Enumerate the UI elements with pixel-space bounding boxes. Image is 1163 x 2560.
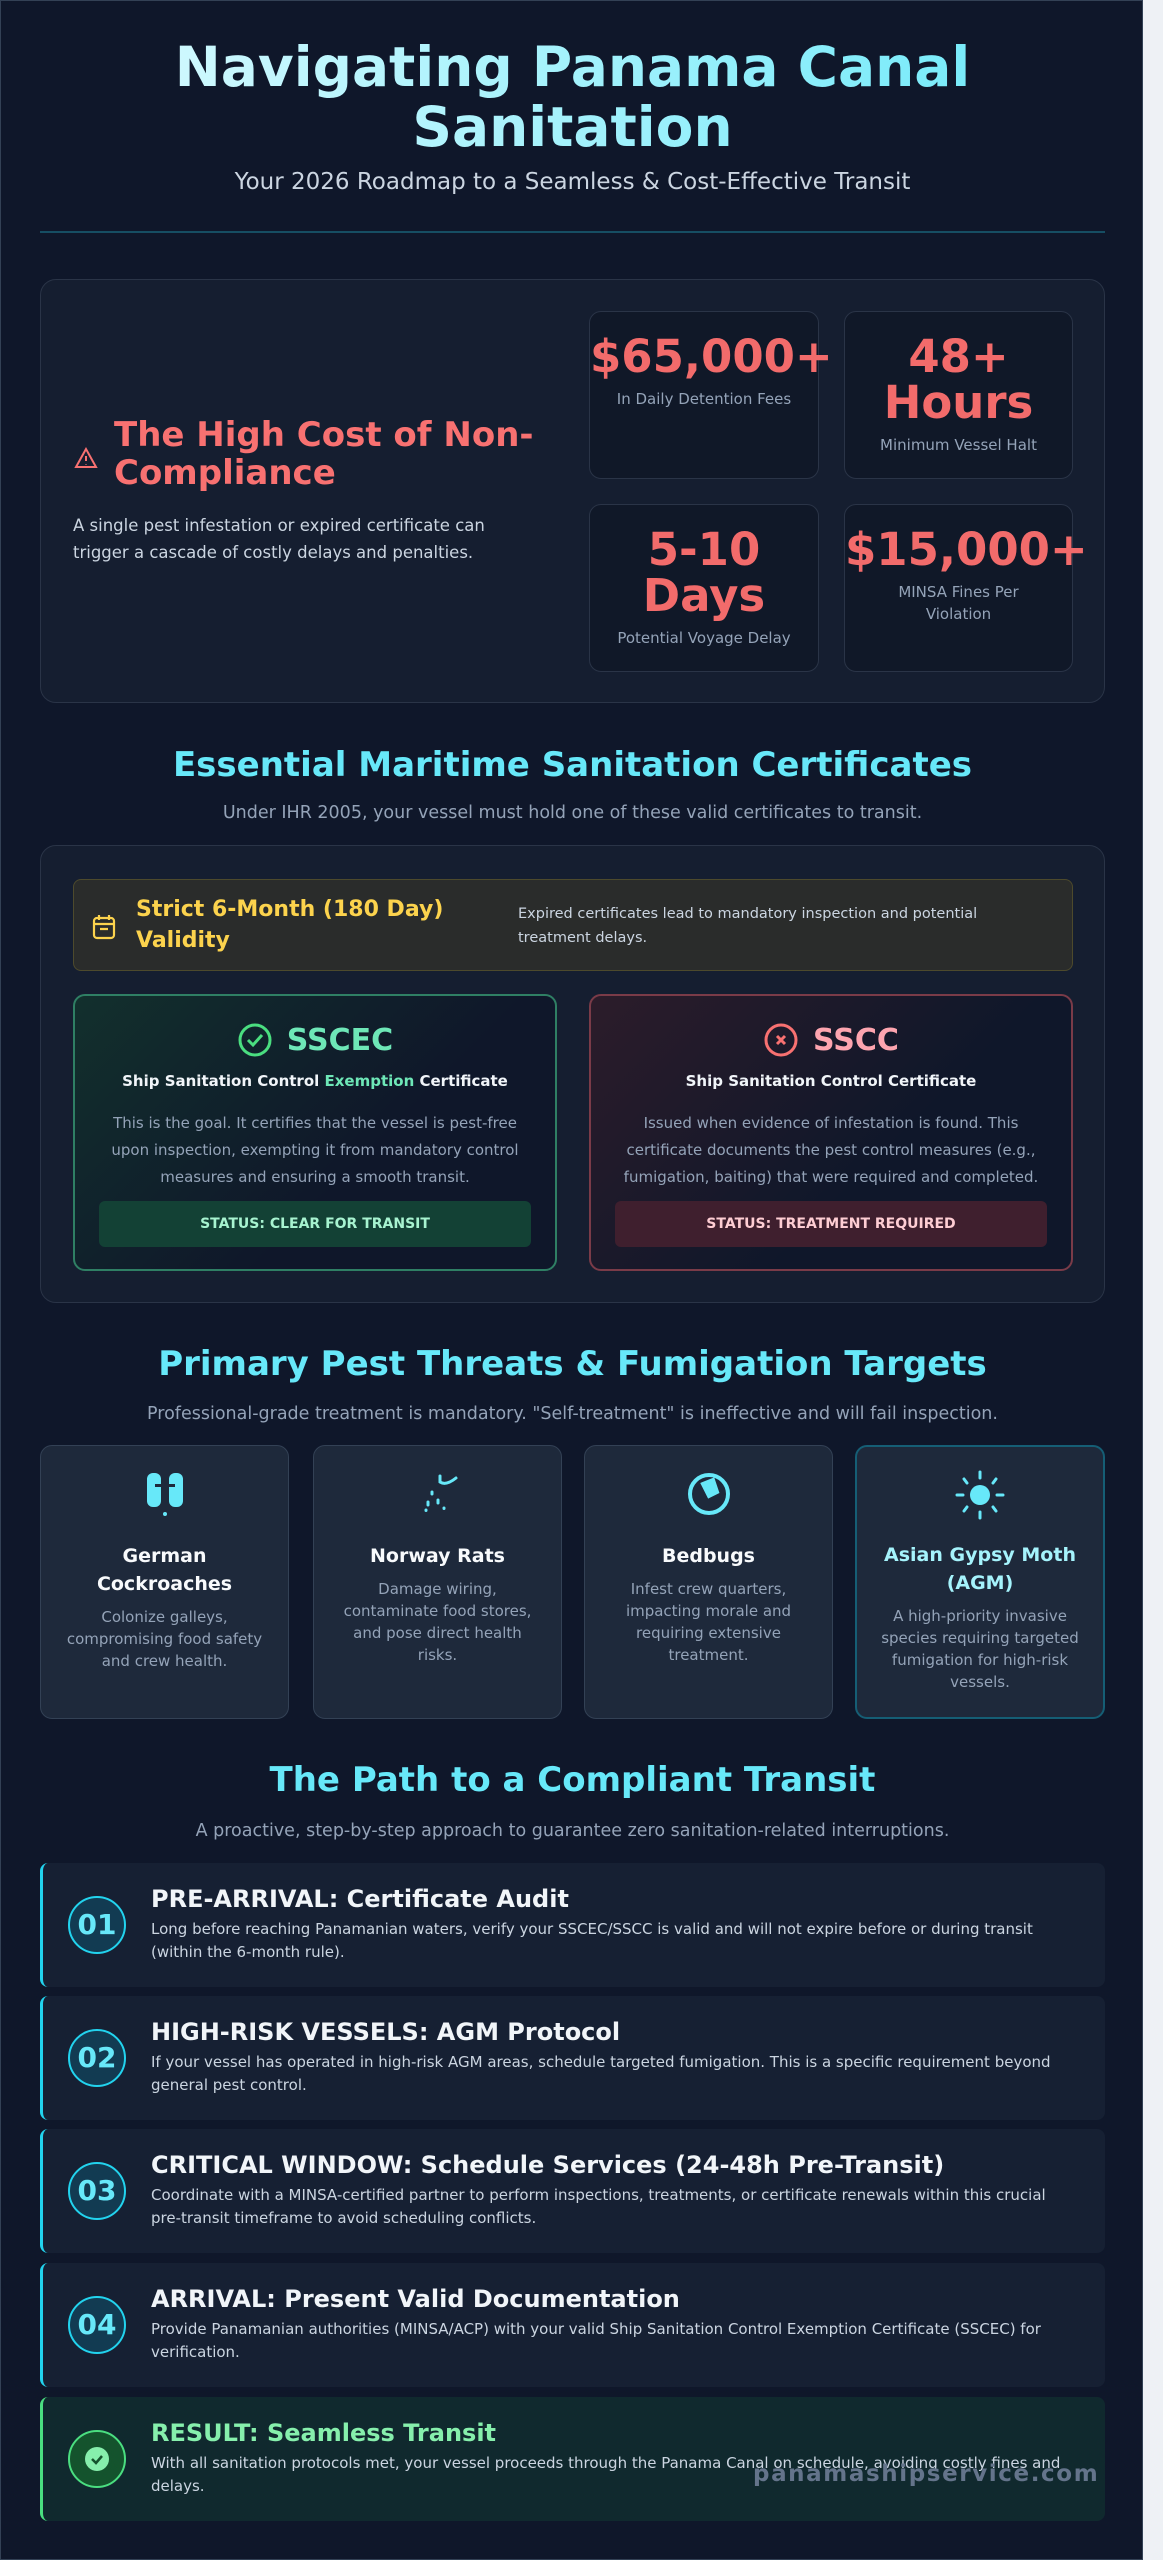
card: SSCC — [589, 994, 1073, 1271]
stat: detention fees: $65,000+ — [590, 330, 833, 383]
step 04: ARRIVAL: Present Valid Documentation — [151, 2285, 680, 2313]
card: SSCC: Ship Sanitation Control Certificate — [686, 1072, 976, 1090]
step 02: HIGH-RISK VESSELS: AGM Protocol — [151, 2018, 620, 2046]
card: SSCEC: This is the goal. It certifies that the vessel is pest-free upon inspection, exempting it from mandatory control measures and ensuring a smooth transit. — [111, 1114, 519, 1186]
card: cockroaches: German — [122, 1545, 206, 1567]
heading: certificates: Essential Maritime Sanitation Certificates — [173, 745, 972, 785]
status: clear: STATUS: CLEAR FOR TRANSIT — [200, 1216, 430, 1232]
step 04: Provide Panamanian authorities (MINSA/ACP) with your valid Ship Sanitation Control Exemption Certificate (SSCEC) for verification. — [151, 2320, 1041, 2361]
stat: voyage delay: Days — [643, 569, 765, 622]
stat: MINSA fines: $15,000+ — [845, 523, 1088, 576]
stat: vessel halt — [844, 311, 1073, 479]
heading: high cost: The High Cost of Non-Compliance — [114, 415, 534, 493]
status: clear — [99, 1201, 531, 1247]
step 02: 02 — [78, 2041, 116, 2074]
card: cockroaches — [40, 1445, 289, 1719]
card: gypsy moth — [855, 1445, 1105, 1719]
heading: pests: Primary Pest Threats & Fumigation Targets — [158, 1344, 987, 1384]
card: rats: Norway Rats — [370, 1545, 505, 1567]
card: rats: Damage wiring, contaminate food stores, and pose direct health risks. — [344, 1580, 531, 1664]
step 04: 04 — [78, 2308, 116, 2341]
subheading: certificates: Under IHR 2005, your vessel must hold one of these valid certificates to transit. — [223, 803, 922, 823]
callout: 6-month validity — [73, 879, 1073, 971]
panel: certificates — [40, 845, 1105, 1303]
card: SSCC: Issued when evidence of infestation is found. This certificate documents the pest control measures (e.g., fumigation, baiting) that were required and completed. — [624, 1114, 1038, 1186]
subheading: path: A proactive, step-by-step approach to guarantee zero sanitation-related interruptions. — [196, 1821, 949, 1841]
heading: path: The Path to a Compliant Transit — [270, 1760, 875, 1800]
card: cockroaches: Colonize galleys, compromising food safety and crew health. — [67, 1608, 262, 1670]
step 01: Long before reaching Panamanian waters, verify your SSCEC/SSCC is valid and will not expire before or during transit (within the 6-month rule). — [151, 1920, 1033, 1961]
step 03: Coordinate with a MINSA-certified partner to perform inspections, treatments, or certificate renewals within this crucial pre-transit timeframe to avoid scheduling conflicts. — [151, 2186, 1046, 2227]
step 02 — [40, 1996, 1105, 2120]
step 01: 01 — [78, 1908, 116, 1941]
subtitle: Your 2026 Roadmap to a Seamless & Cost-Effective Transit — [235, 169, 910, 195]
title — [1, 37, 1144, 157]
card: SSCEC: Ship Sanitation Control Exemption Certificate — [122, 1072, 508, 1090]
status: treatment — [615, 1201, 1047, 1247]
card: SSCC: SSCC — [813, 1022, 899, 1058]
stat: vessel halt: Minimum Vessel Halt — [880, 436, 1037, 454]
stat: MINSA fines — [844, 504, 1073, 672]
stat: detention fees — [589, 311, 819, 479]
text: intro: A single pest infestation or expired certificate can trigger a cascade of costly delays and penalties. — [73, 516, 485, 562]
step 01: PRE-ARRIVAL: Certificate Audit — [151, 1885, 569, 1913]
step 03 — [40, 2129, 1105, 2253]
step 02: If your vessel has operated in high-risk AGM areas, schedule targeted fumigation. This is a specific requirement beyond general pest control. — [151, 2053, 1051, 2094]
step 04 — [40, 2263, 1105, 2387]
panel: high cost of non-compliance — [40, 279, 1105, 703]
card: rats — [313, 1445, 562, 1719]
card: gypsy moth: A high-priority invasive species requiring targeted fumigation for high-risk vessels. — [881, 1607, 1079, 1691]
icon: warning — [74, 447, 98, 468]
step 01 — [40, 1863, 1105, 1987]
card: SSCEC: SSCEC — [287, 1022, 393, 1058]
card: SSCEC — [73, 994, 557, 1271]
callout: 6-month validity: Expired certificates lead to mandatory inspection and potential treatment delays. — [518, 906, 977, 946]
step 03: 03 — [78, 2174, 116, 2207]
title: Navigating Panama Canal — [175, 35, 970, 99]
title: Sanitation — [412, 95, 733, 159]
stat: vessel halt: Hours — [884, 376, 1033, 429]
card: bedbugs: Infest crew quarters, impacting morale and requiring extensive treatment. — [626, 1580, 791, 1664]
step: result — [40, 2397, 1105, 2521]
card: gypsy moth: Asian Gypsy Moth (AGM) — [884, 1544, 1076, 1594]
status: treatment: STATUS: TREATMENT REQUIRED — [706, 1216, 956, 1232]
icon: calendar — [92, 915, 116, 940]
stat: voyage delay: 5-10 — [648, 523, 760, 576]
stat: detention fees: In Daily Detention Fees — [617, 390, 791, 408]
card: cockroaches: Cockroaches — [97, 1573, 232, 1595]
card: bedbugs: Bedbugs — [662, 1545, 755, 1567]
subheading: pests: Professional-grade treatment is mandatory. "Self-treatment" is ineffective and will fail inspection. — [147, 1404, 998, 1424]
step: result: With all sanitation protocols met, your vessel proceeds through the Panama Canal on schedule, avoiding costly fines and delays. — [151, 2454, 1060, 2495]
stat: voyage delay — [589, 504, 819, 672]
callout: 6-month validity: Strict 6-Month (180 Day) Validity — [136, 897, 443, 953]
stat: voyage delay: Potential Voyage Delay — [617, 629, 791, 647]
card: bedbugs — [584, 1445, 833, 1719]
step: result: RESULT: Seamless Transit — [151, 2419, 496, 2447]
watermark: panamashipservice.com — [753, 2461, 1099, 2487]
stat: MINSA fines: MINSA Fines Per Violation — [898, 583, 1019, 623]
stat: vessel halt: 48+ — [908, 330, 1009, 383]
step 03: CRITICAL WINDOW: Schedule Services (24-48h Pre-Transit) — [151, 2151, 944, 2179]
